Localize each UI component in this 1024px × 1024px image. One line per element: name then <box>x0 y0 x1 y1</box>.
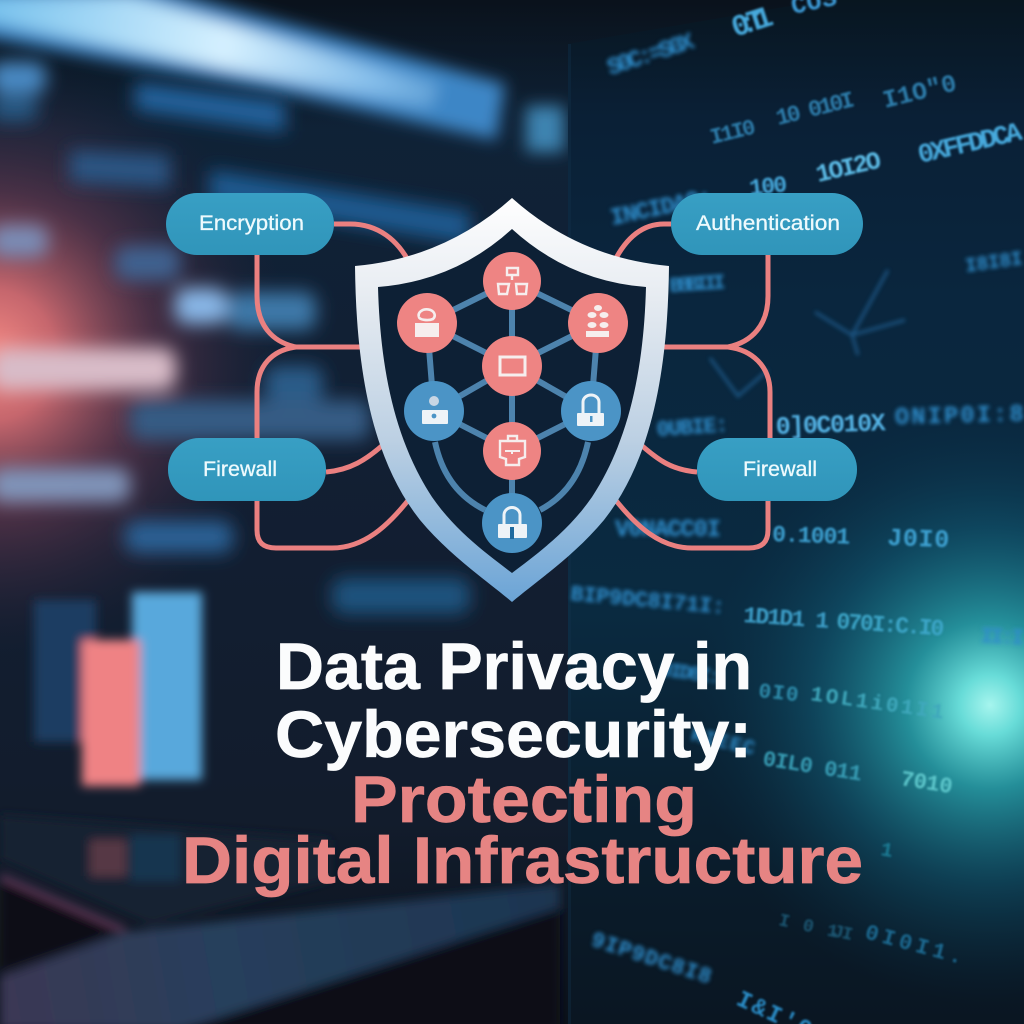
binary code rows on data panel: 10 010I <box>773 87 857 132</box>
title <box>182 629 863 897</box>
node: right <box>568 293 628 353</box>
title line 1: Data Privacy in <box>276 629 752 703</box>
binary code rows on data panel: II:I <box>980 624 1024 651</box>
binary code rows on data panel: JI <box>831 922 854 946</box>
binary code rows on data panel: 9IP9DC8I8 <box>588 928 714 990</box>
blurred ceiling light streak <box>0 0 564 152</box>
pill: Authentication: Authentication <box>696 212 840 235</box>
pill: Encryption <box>166 193 334 255</box>
blurred screen data rows on left <box>0 62 470 614</box>
blurred bar chart on background monitor <box>34 592 202 786</box>
binary code rows on data panel: ONIP0I:8 <box>895 402 1024 432</box>
binary code rows on data panel: I8I8I <box>964 248 1024 279</box>
node: left blue <box>404 381 464 441</box>
pill: Authentication <box>671 193 863 255</box>
node: left <box>397 293 457 353</box>
node: bottom blue <box>482 493 542 553</box>
binary code rows on data panel: I01 <box>777 911 840 943</box>
shield outer frame <box>355 198 669 602</box>
pill: Firewall right: Firewall <box>743 458 817 481</box>
binary code rows on data panel: 0UBIE: <box>656 413 729 443</box>
binary code rows on data panel: I1O"0 <box>880 69 960 116</box>
pill: Firewall left <box>168 438 326 501</box>
node: mid red <box>483 422 541 480</box>
pill: Firewall right <box>697 438 857 501</box>
binary code rows on data panel: 0XFFDDCA <box>915 119 1024 172</box>
binary code rows on data panel: 1 <box>879 839 895 864</box>
binary code rows on data panel: INCIDAO: <box>608 185 715 233</box>
binary code rows on data panel: 1OI2O <box>813 147 884 190</box>
binary code rows on data panel: 0.1001 <box>772 522 851 551</box>
binary code rows on data panel: 0I0I1. <box>862 921 965 971</box>
binary code rows on data panel: 1OL1i01I1 <box>809 684 945 726</box>
binary code rows on data panel: B8BIII <box>669 272 726 299</box>
binary code rows on data panel: 0:T1 <box>728 1 778 47</box>
binary code rows on data panel: 0I0 <box>757 681 799 708</box>
pill: Firewall left: Firewall <box>203 458 277 481</box>
shield <box>355 198 669 602</box>
binary code rows on data panel: 100 <box>748 172 789 202</box>
node: top <box>483 252 541 310</box>
network links <box>427 281 598 523</box>
title line 3: Protecting <box>351 762 697 836</box>
shield inner field <box>378 229 646 573</box>
binary code rows on data panel: 7010 <box>899 767 954 800</box>
binary code rows on data panel: 1D1D1 1 <box>743 603 830 635</box>
blurred laptop and desk <box>0 815 560 1024</box>
binary code rows on data panel: J0I0 <box>887 524 950 555</box>
title line 2: Cybersecurity: <box>275 697 752 771</box>
connector lines: left side <box>257 224 410 548</box>
node: right blue <box>561 381 621 441</box>
binary code rows on data panel: 070I:C.I0 <box>836 609 945 643</box>
pill: Encryption: Encryption <box>199 212 304 235</box>
binary code rows on data panel: BIP9DC8I71I: <box>569 582 726 620</box>
connector lines: right side <box>614 224 770 548</box>
binary code rows on data panel: 0]0C010X <box>775 409 886 442</box>
node: center <box>482 336 542 396</box>
binary code rows on data panel: 0ID8I: <box>659 659 722 690</box>
faint network glow <box>710 270 905 396</box>
binary code rows on data panel: S0C:=S0X <box>604 29 699 83</box>
binary code rows on data panel: V0NACC0I <box>615 517 721 544</box>
title line 4: Digital Infrastructure <box>182 823 863 897</box>
binary code rows on data panel: 0IL0 011 <box>761 747 864 788</box>
binary code rows on data panel <box>569 0 1024 1024</box>
right data panel <box>568 0 1024 1024</box>
binary code rows on data panel: RIEEC <box>688 724 757 761</box>
binary code rows on data panel: I1I0 <box>708 115 758 151</box>
